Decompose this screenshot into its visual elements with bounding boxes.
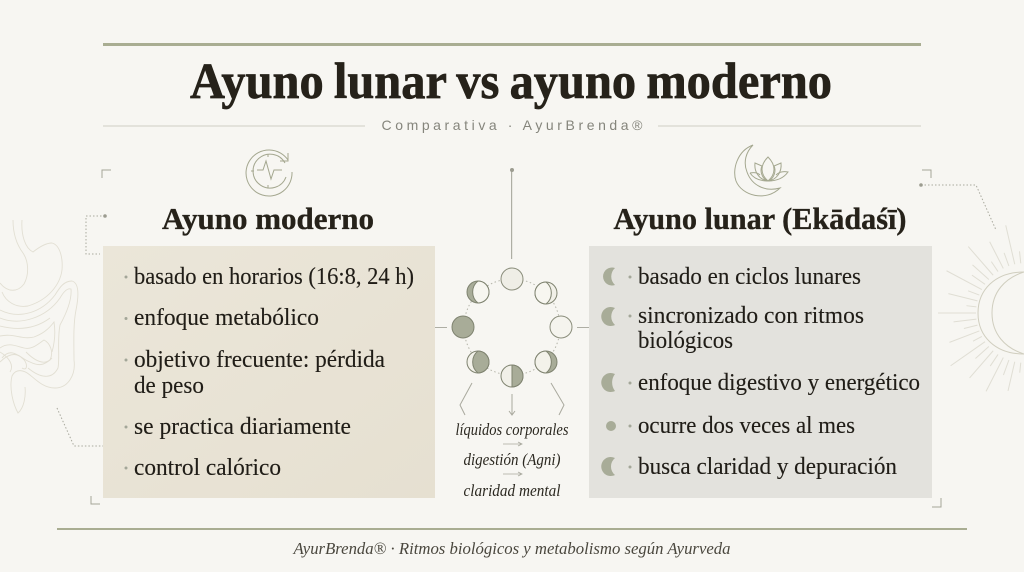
title: Ayuno lunar vs ayuno moderno bbox=[190, 54, 832, 110]
moon right bbox=[550, 316, 572, 338]
list: lunar: basado en ciclos lunares bbox=[638, 264, 861, 290]
icon: thick crescent bbox=[601, 373, 615, 392]
list: lunar: biológicos bbox=[638, 328, 733, 354]
list: moderno: basado en horarios (16:8, 24 h) bbox=[134, 264, 414, 290]
icon: crescent bbox=[601, 307, 615, 326]
panel background: lunar bbox=[589, 246, 932, 498]
heading: ayuno moderno: Ayuno moderno bbox=[162, 201, 374, 236]
illustration: digestive system bbox=[0, 220, 78, 413]
top connector bbox=[510, 168, 514, 259]
list: moderno: de peso bbox=[134, 373, 204, 399]
text: claridad mental: claridad mental bbox=[464, 481, 561, 500]
decorative corner marks and connectors bbox=[57, 170, 996, 507]
list: lunar: enfoque digestivo y energético bbox=[638, 370, 920, 396]
arrow bbox=[503, 472, 522, 476]
moon lower right bbox=[535, 351, 557, 373]
list: moderno: enfoque metabólico bbox=[134, 305, 319, 331]
list: lunar: busca claridad y depuración bbox=[638, 454, 897, 480]
list: moderno: control calórico bbox=[134, 455, 281, 481]
icon: full moon dot bbox=[606, 421, 616, 431]
list: lunar: sincronizado con ritmos bbox=[638, 303, 864, 329]
panel background: moderno bbox=[103, 246, 435, 498]
list: moderno: objetivo frecuente: pérdida bbox=[134, 347, 385, 373]
text: digestion: digestión (Agni) bbox=[464, 450, 561, 469]
footer text: AyurBrenda® · Ritmos biológicos y metabolismo según Ayurveda bbox=[293, 539, 730, 558]
list: lunar bbox=[601, 264, 920, 480]
moon top bbox=[501, 268, 523, 290]
heading: ayuno lunar: Ayuno lunar (Ekādaśī) bbox=[614, 201, 906, 236]
icon: clock with heartbeat bbox=[246, 150, 292, 196]
moon upper left bbox=[467, 281, 489, 303]
illustration: crescent and sun rays bbox=[938, 225, 1024, 395]
arrow bbox=[503, 442, 522, 446]
branch lines and arrow bbox=[460, 383, 564, 415]
moon upper right bbox=[535, 282, 557, 304]
icon: thin crescent bbox=[601, 457, 615, 476]
orbit bbox=[464, 279, 560, 375]
moon phase diagram bbox=[435, 168, 589, 500]
subtitle with rules: Comparativa · AyurBrenda® bbox=[382, 117, 643, 133]
bottom rule bbox=[57, 528, 967, 530]
moon bottom bbox=[501, 365, 523, 387]
side connectors bbox=[435, 327, 589, 328]
text: liquidos corporales: líquidos corporales bbox=[456, 420, 569, 439]
top rule bbox=[103, 43, 921, 46]
panel: ayuno lunar bbox=[589, 145, 932, 498]
panel: ayuno moderno bbox=[103, 150, 435, 498]
icon: thin crescent bbox=[603, 268, 615, 286]
list: moderno bbox=[124, 264, 414, 481]
moon lower left bbox=[467, 351, 489, 373]
list: moderno: se practica diariamente bbox=[134, 414, 351, 440]
list: lunar: ocurre dos veces al mes bbox=[638, 413, 855, 439]
icon: crescent and lotus bbox=[735, 145, 788, 196]
moon left bbox=[452, 316, 474, 338]
